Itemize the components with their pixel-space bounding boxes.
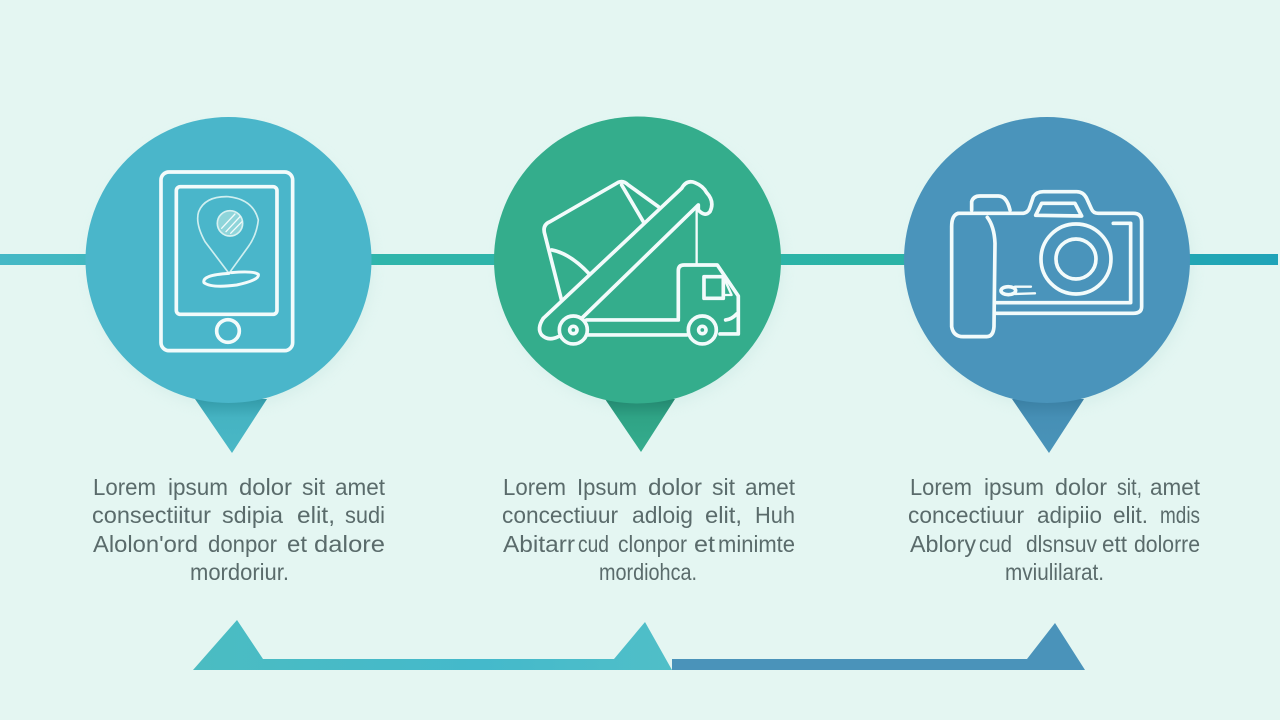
soft circle shadows bbox=[90, 126, 1192, 408]
text block 3 bbox=[908, 474, 1201, 585]
bar segment: teal bbox=[193, 620, 672, 670]
text block 2: minimte bbox=[718, 531, 795, 557]
icon: tablet with map pin bbox=[161, 172, 293, 351]
text block 3: Ablory bbox=[910, 531, 976, 557]
text block 1: amet bbox=[335, 474, 386, 500]
text block 2: clonpor bbox=[618, 531, 687, 557]
text block 3: ipsum bbox=[984, 474, 1044, 500]
circle 2 bbox=[494, 116, 781, 404]
step 2: crane truck bbox=[494, 116, 781, 452]
step 1: location tablet bbox=[86, 117, 372, 453]
text block 1: consectiitur bbox=[92, 502, 211, 528]
text block 3: dolorre bbox=[1134, 531, 1200, 557]
text block 1: sudi bbox=[345, 502, 385, 528]
text block 2: concectiuur bbox=[502, 502, 618, 528]
text block 2: Ipsum bbox=[577, 474, 637, 500]
text block 1: sit bbox=[302, 474, 326, 500]
text block 1: dalore bbox=[314, 531, 385, 557]
timeline connector line bbox=[0, 254, 1278, 265]
bottom progress bar with triangles bbox=[193, 620, 1085, 670]
text block 3: amet bbox=[1150, 474, 1201, 500]
text block 1: sdipia bbox=[222, 502, 283, 528]
text block 2: et bbox=[694, 531, 716, 557]
icon: crane truck with container bbox=[540, 182, 738, 344]
text block 3: ett bbox=[1102, 531, 1128, 557]
text block 1: ipsum bbox=[168, 474, 228, 500]
text block 3: sit, bbox=[1117, 474, 1142, 500]
text block 3: mviulilarat. bbox=[1005, 559, 1104, 585]
text block 3: mdis bbox=[1160, 502, 1200, 528]
text block 1: et bbox=[287, 531, 308, 557]
icon: camera bbox=[952, 192, 1142, 337]
text block 2: Lorem bbox=[503, 474, 566, 500]
text block 3: cud bbox=[979, 531, 1012, 557]
text block 1 bbox=[92, 474, 386, 585]
pointer triangle 1 bbox=[195, 399, 267, 453]
text block 2: dolor bbox=[648, 474, 702, 500]
pointer triangle 2 bbox=[605, 399, 675, 452]
pointer triangle 3 bbox=[1012, 399, 1084, 453]
text block 1: Lorem bbox=[93, 474, 156, 500]
circle 1 bbox=[86, 117, 372, 403]
text block 2: elit, bbox=[705, 502, 742, 528]
text block 2: mordiohca. bbox=[599, 559, 697, 585]
text block 3: adipiio bbox=[1037, 502, 1102, 528]
text block 2: adloig bbox=[632, 502, 693, 528]
text block 3: dlsnsuv bbox=[1026, 531, 1097, 557]
text block 1: Alolon'ord bbox=[93, 531, 198, 557]
text block 1: mordoriur. bbox=[190, 559, 289, 585]
text block 3: dolor bbox=[1055, 474, 1107, 500]
text block 1: dolor bbox=[239, 474, 292, 500]
bar segment: blue bbox=[672, 623, 1085, 670]
circle 3 bbox=[904, 117, 1190, 403]
text block 2: Abitarr bbox=[503, 531, 575, 557]
text block 3: concectiuur bbox=[908, 502, 1024, 528]
text block 1: donpor bbox=[208, 531, 277, 557]
text block 1: elit, bbox=[297, 502, 335, 528]
text block 2: Huh bbox=[755, 502, 795, 528]
text block 2 bbox=[502, 474, 796, 585]
step 3: camera bbox=[904, 117, 1190, 453]
text block 3: Lorem bbox=[910, 474, 972, 500]
text block 2: amet bbox=[745, 474, 796, 500]
text block 2: cud bbox=[578, 531, 609, 557]
text block 3: elit. bbox=[1113, 502, 1148, 528]
text block 2: sit bbox=[712, 474, 736, 500]
